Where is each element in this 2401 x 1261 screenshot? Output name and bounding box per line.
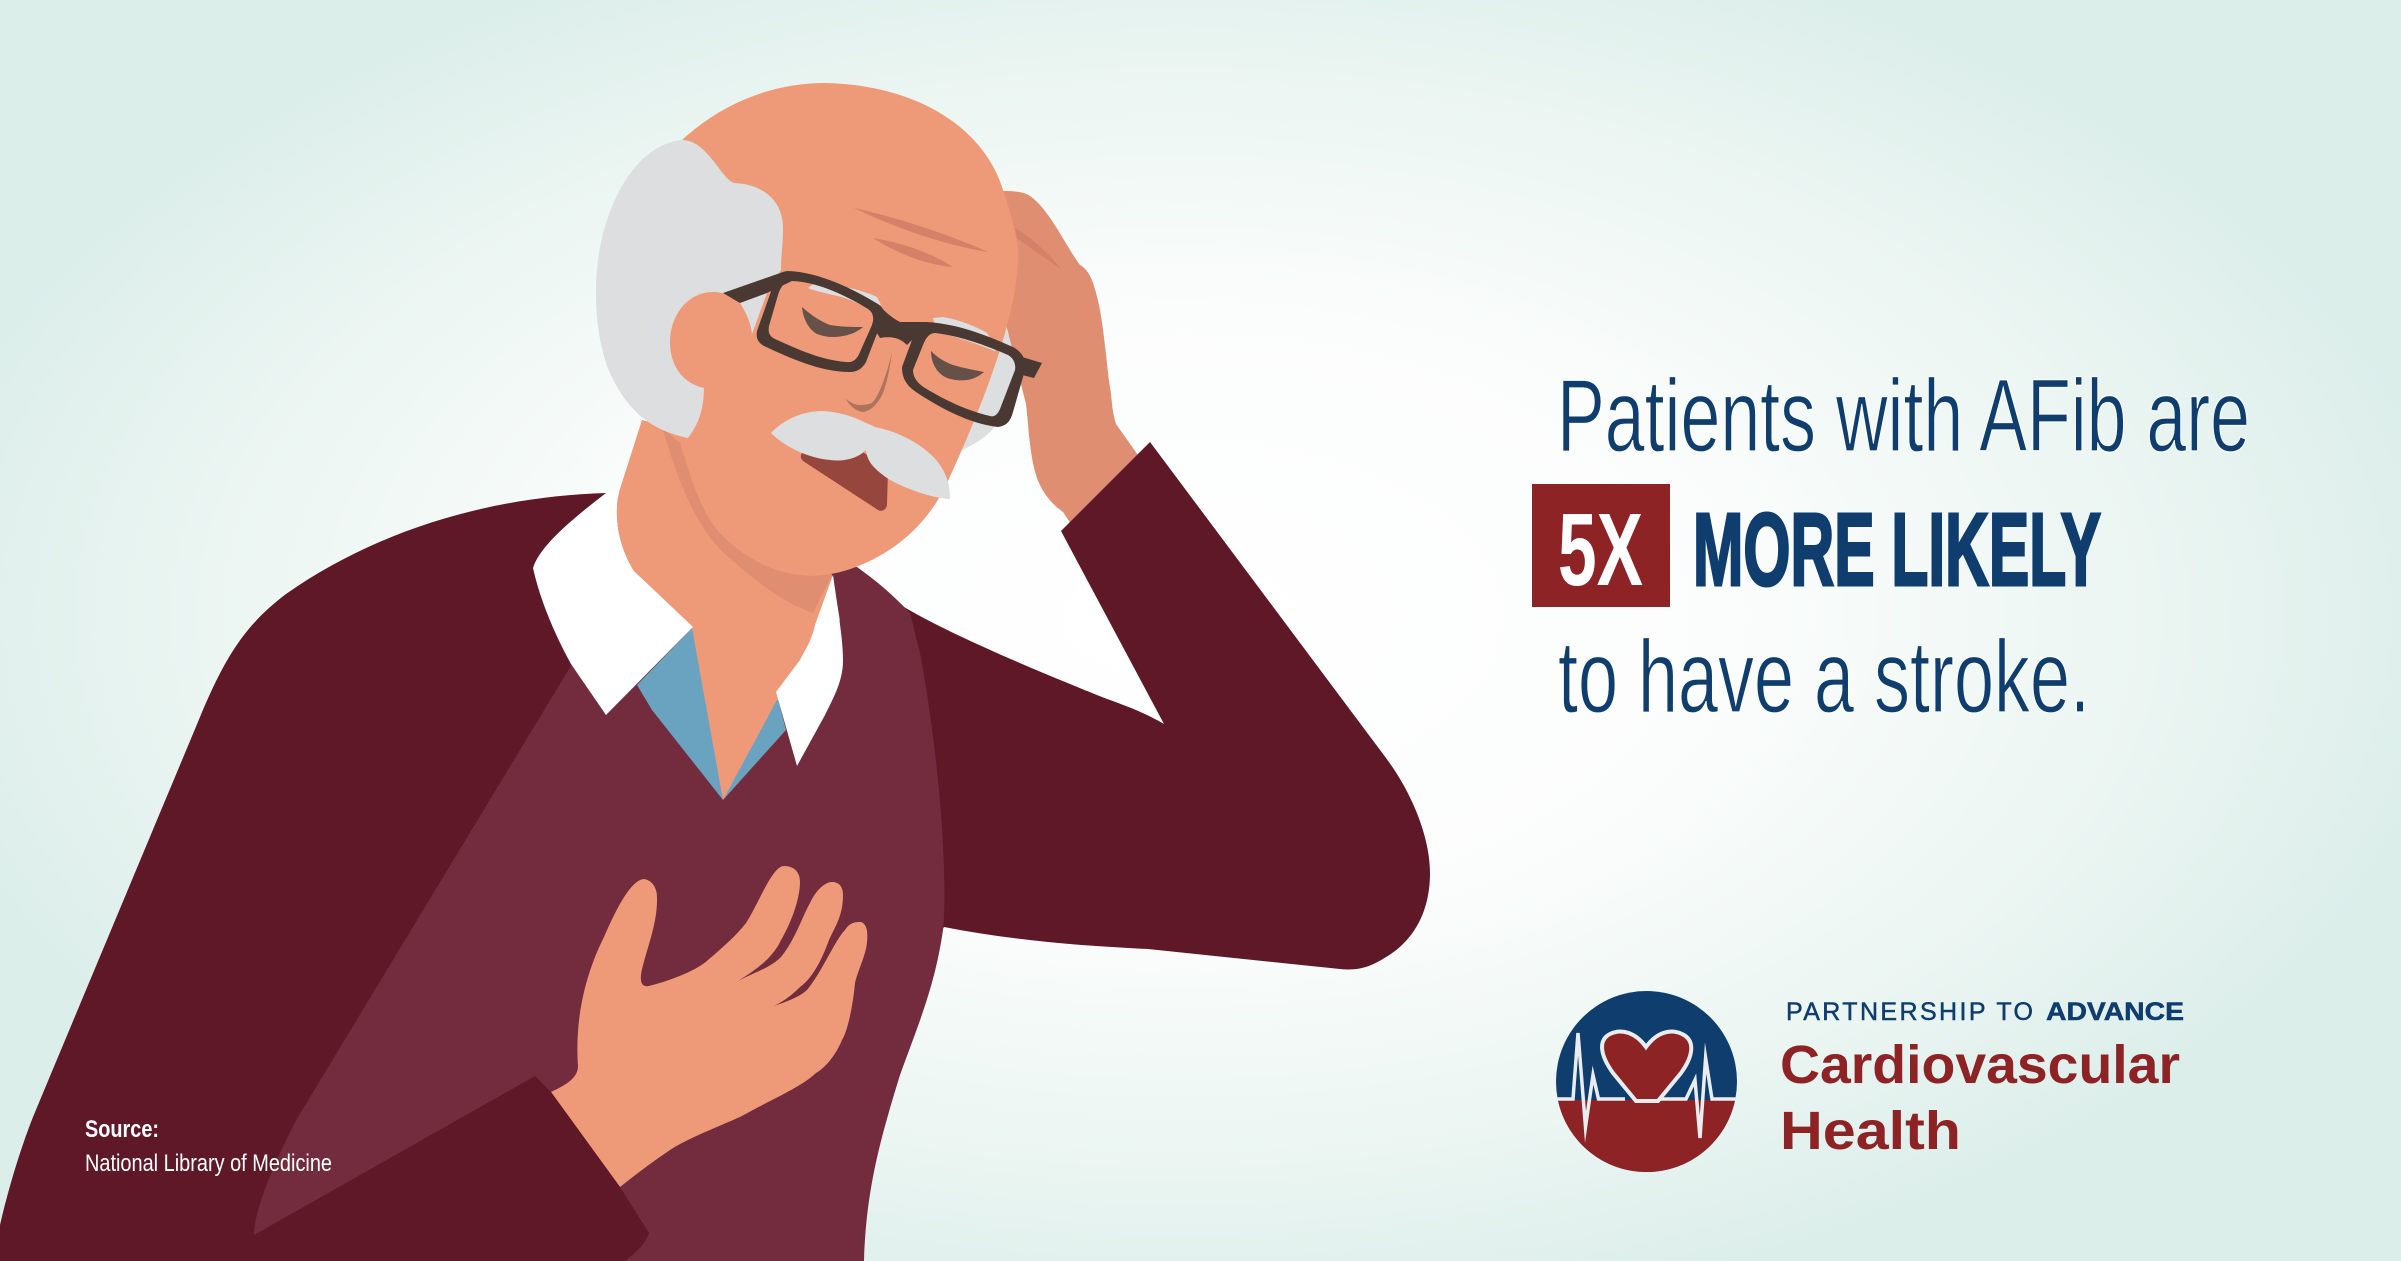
logo mark [1556, 991, 1737, 1172]
right collar [776, 575, 843, 766]
sweater vest [254, 567, 944, 1261]
text line 3: to have a stroke. [1558, 619, 2090, 734]
closed eyes [802, 307, 984, 380]
ear [670, 292, 752, 388]
hair, left side [596, 140, 783, 438]
hand on head [1000, 191, 1140, 530]
forehead wrinkles [854, 208, 988, 267]
source note: National Library of Medicine [85, 1150, 332, 1177]
sweater body and raised arm [0, 442, 1430, 1261]
source note: Source: [85, 1116, 159, 1143]
mouth [801, 450, 888, 511]
logo text: Health [1780, 1101, 1961, 1161]
illustration: elderly man with chest and head pain [0, 83, 1430, 1261]
head [640, 83, 1018, 576]
right lens frame [902, 322, 1025, 427]
blue shirt [637, 627, 786, 800]
logo text: PARTNERSHIP TO [1786, 998, 2033, 1026]
moustache [771, 411, 950, 499]
logo [1556, 991, 2184, 1172]
headline [1532, 358, 2250, 734]
right temple [1018, 357, 1042, 378]
hair behind head, right side [940, 250, 1035, 460]
highlight box: 5X [1532, 484, 1670, 607]
glasses [723, 271, 1042, 427]
logo text: ADVANCE [2046, 998, 2184, 1026]
left collar [533, 490, 693, 715]
text line 2: MORE LIKELY [1693, 492, 2101, 607]
highlight box: 5X: 5X [1558, 492, 1643, 607]
chest hand [551, 866, 867, 1187]
bridge [872, 304, 927, 345]
hand wrinkle [1015, 228, 1061, 269]
neck shadow [660, 420, 832, 613]
logo text: Cardiovascular [1780, 1035, 2180, 1095]
sleeve cuff [254, 1076, 649, 1261]
lens glints [808, 283, 997, 351]
left lens frame [757, 271, 884, 372]
logo text [1780, 998, 2184, 1161]
source note [85, 1116, 332, 1177]
nose [846, 352, 892, 412]
left temple [723, 272, 792, 303]
neck [617, 420, 840, 800]
